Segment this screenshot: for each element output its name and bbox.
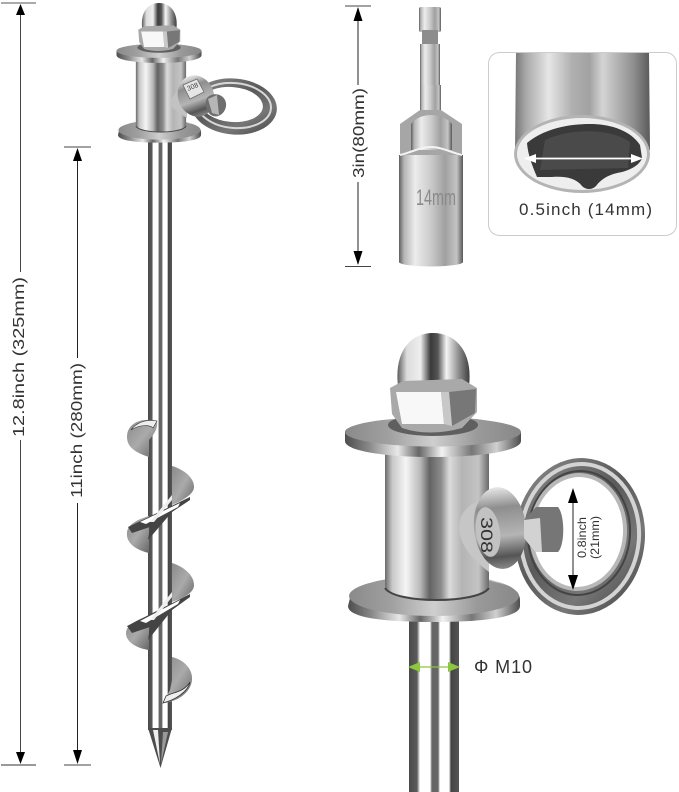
dimension: overall length 12.8 inch: 12.8inch (325mm) bbox=[11, 277, 28, 437]
detail swivel body, flanges and cap nut bbox=[345, 333, 521, 622]
stake shaft and tip bbox=[148, 140, 172, 768]
ground anchor: full stake bbox=[117, 3, 279, 768]
inset caption: 0.5inch (14mm) bbox=[519, 200, 652, 219]
inner width arrow bbox=[524, 154, 643, 163]
detail eye bolt neck bbox=[459, 485, 563, 572]
detail eye bolt neck: 308 bbox=[477, 517, 496, 553]
dimension: socket length 3 inch: 3in(80mm) bbox=[351, 88, 368, 178]
ring size label: 0.8inch bbox=[575, 517, 589, 558]
helical screw blades bbox=[126, 420, 194, 703]
small eye bolt neck: 308 bbox=[186, 82, 200, 93]
hex nut socket driver bbox=[399, 7, 463, 266]
dimension: socket length 3 inch bbox=[345, 6, 371, 266]
detail shaft bbox=[409, 618, 459, 792]
small eye bolt neck bbox=[170, 70, 226, 122]
shaft diameter label: Φ M10 bbox=[474, 657, 532, 677]
dimension: shaft length 11 inch: 11inch (280mm) bbox=[69, 363, 86, 498]
ring inner diameter arrow bbox=[568, 488, 578, 590]
detail: swivel head close-up bbox=[345, 333, 650, 792]
socket size marking: 14mm bbox=[416, 185, 456, 210]
shaft diameter arrow bbox=[408, 662, 460, 672]
socket opening close-up bbox=[514, 53, 650, 193]
small eye ring bbox=[189, 75, 279, 138]
detail: swivel head close-up: (21mm) bbox=[588, 516, 602, 559]
small swivel head bbox=[117, 3, 202, 143]
dimension: overall length 12.8 inch bbox=[1, 3, 36, 765]
dimension: shaft length 11 inch bbox=[64, 147, 91, 765]
inset panel: socket opening bbox=[488, 52, 676, 236]
detail eye ring bbox=[510, 454, 650, 619]
